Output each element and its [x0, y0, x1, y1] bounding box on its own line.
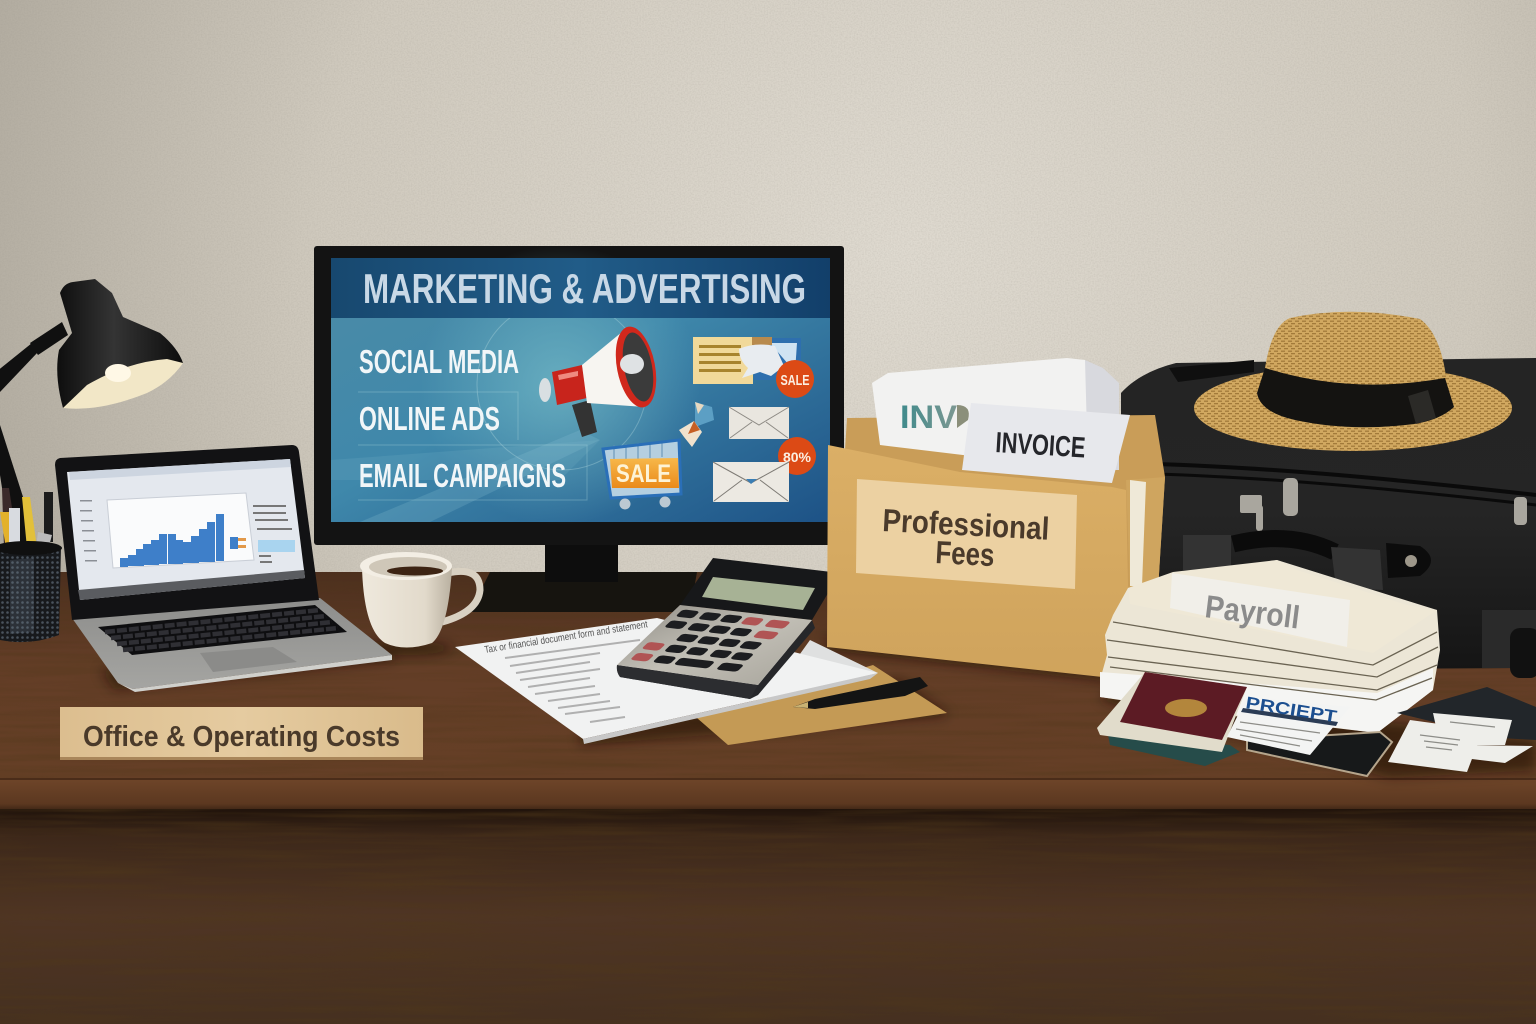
wooden label: office and operating costs — [60, 707, 423, 760]
icon: shopping cart: SALE — [616, 460, 671, 488]
icon: sale badge — [776, 360, 814, 398]
icon: discount badge: 80% — [783, 449, 812, 465]
screen title: MARKETING & ADVERTISING — [363, 265, 806, 312]
receipt print — [1420, 722, 1495, 750]
wall background — [0, 0, 1536, 600]
passports — [1097, 672, 1247, 766]
receipts and wallet — [1388, 687, 1536, 772]
invoice paper front — [962, 403, 1130, 483]
suitcase wheel — [1482, 610, 1536, 678]
suitcase — [1121, 358, 1536, 678]
icon: shopping cart — [603, 440, 681, 510]
wooden label: professional fees: Fees — [935, 534, 995, 573]
side panel — [230, 505, 295, 563]
icon: coupon card — [693, 337, 801, 384]
desk top surface — [0, 572, 1536, 782]
icon: envelope lower — [713, 462, 789, 502]
icon: pie fragments — [679, 402, 714, 447]
lamp head — [57, 279, 183, 409]
red passport — [1097, 672, 1247, 752]
calculator — [617, 558, 840, 699]
payroll card: Payroll — [1203, 588, 1302, 636]
sheet edges — [1107, 622, 1438, 700]
pen holder with pencils — [0, 488, 62, 642]
laptop display — [67, 459, 305, 600]
pen — [793, 677, 928, 709]
paperwork — [455, 618, 878, 744]
contact shadows — [100, 635, 1536, 778]
laptop lid — [55, 445, 319, 620]
monitor screen — [331, 245, 830, 525]
stack body — [1100, 560, 1440, 733]
keyboard — [98, 605, 347, 655]
list: social media: SOCIAL MEDIA — [359, 343, 519, 380]
top strap — [1169, 360, 1254, 382]
desk front edge — [0, 778, 1536, 810]
laptop — [55, 445, 392, 692]
trackpad — [200, 647, 297, 672]
ticket: PRCIEPT — [1244, 693, 1339, 726]
wooden label: professional fees: Professional — [882, 502, 1050, 547]
bar chart — [120, 514, 224, 567]
paperwork: Tax or financial document form and statement — [484, 619, 649, 656]
folder front — [827, 445, 1130, 680]
payroll card — [1170, 573, 1350, 647]
title band — [331, 258, 830, 318]
monitor stand — [470, 540, 697, 612]
top sheet — [1128, 560, 1437, 653]
invoice paper back — [872, 358, 1119, 470]
monitor — [314, 245, 844, 612]
laptop base — [72, 598, 392, 692]
carry handle — [1183, 535, 1431, 590]
zipper pulls — [1240, 478, 1527, 531]
calculator keys — [630, 609, 791, 672]
icon: discount badge — [778, 437, 816, 475]
invoice paper back: INV — [900, 399, 958, 435]
invoice paper front: INVOICE — [995, 427, 1086, 464]
dark wallet — [1397, 687, 1536, 740]
green passport — [1108, 735, 1240, 766]
desk lower panel — [0, 809, 1536, 1024]
wooden label: professional fees — [856, 479, 1077, 589]
mesh cup — [0, 541, 62, 642]
list: online ads: ONLINE ADS — [359, 400, 500, 437]
envelope on desk — [697, 665, 947, 745]
desk — [0, 572, 1536, 1024]
desk lamp — [0, 279, 183, 552]
suitcase body — [1121, 358, 1536, 670]
icon: megaphone — [539, 323, 662, 437]
folder of invoices — [827, 358, 1165, 680]
zipper — [1154, 464, 1536, 505]
lamp arm — [0, 322, 68, 552]
icon: envelope upper — [729, 407, 789, 439]
pencils — [0, 488, 53, 550]
list: email campaigns: EMAIL CAMPAIGNS — [359, 457, 566, 494]
wooden label: office and operating costs: Office & Operating Costs — [83, 721, 400, 753]
calculator display — [702, 577, 815, 610]
coffee cup — [360, 552, 480, 648]
phone — [1247, 732, 1392, 776]
icon: sale badge: SALE — [780, 372, 810, 389]
list dividers — [358, 392, 587, 500]
payroll paper stack — [1100, 560, 1440, 733]
white lower sheets — [1100, 668, 1433, 733]
hat band — [1257, 368, 1454, 427]
receipts — [1388, 713, 1533, 772]
folder back — [840, 415, 1165, 680]
straw hat — [1194, 312, 1512, 451]
ticket — [1227, 693, 1350, 755]
monitor bezel — [314, 246, 844, 545]
